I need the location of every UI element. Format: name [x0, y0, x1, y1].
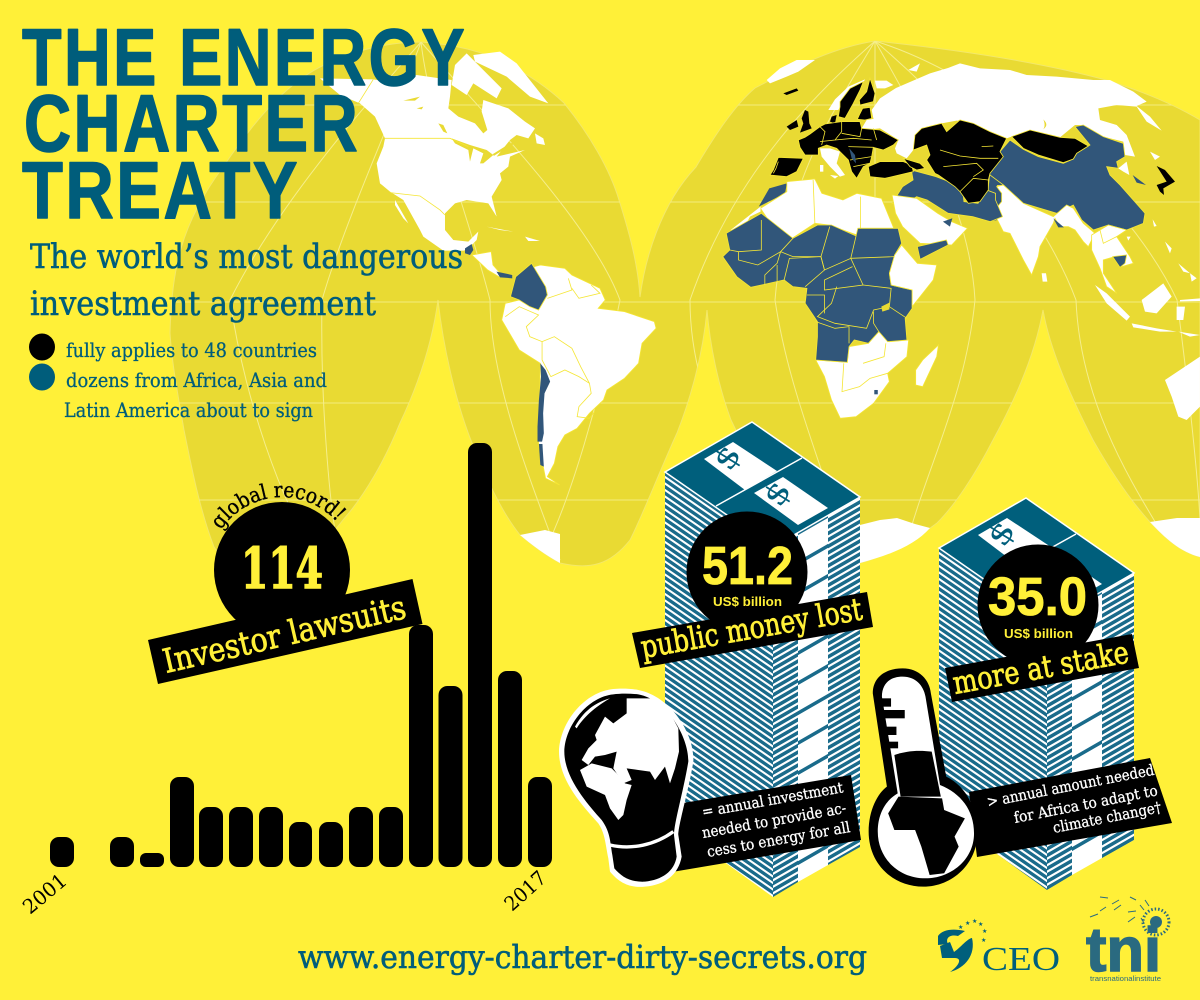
north america and greenland [320, 52, 548, 255]
icon: light bulb with globe [559, 689, 693, 887]
legend marker: black [29, 334, 55, 360]
europe and central asia [767, 60, 1007, 203]
legend: Latin America about to sign [64, 398, 313, 422]
legend [29, 334, 327, 422]
logo: CEO [938, 918, 1060, 978]
logo: CEO: ★ [965, 920, 970, 927]
money stack 1: $ [756, 474, 798, 513]
logo: tni: transnationalinstitute [1090, 974, 1161, 983]
callout: 35.0 more at stake: 35.0 [988, 567, 1087, 627]
subtitle: The world’s most dangerous [30, 237, 463, 277]
callout: 35.0 more at stake [945, 544, 1139, 702]
callout: 35.0 more at stake: more at stake [950, 635, 1132, 702]
logo: CEO: ★ [982, 928, 987, 935]
south east islands and australia [1095, 283, 1200, 420]
india [993, 185, 1095, 275]
callout: 51.2 public money lost: US$ billion [713, 594, 782, 609]
callout: 114 investor lawsuits [148, 483, 422, 684]
logo: CEO: ★ [981, 937, 986, 944]
title: CHARTER [24, 79, 360, 169]
icon: thermometer with africa [869, 668, 977, 887]
title: THE ENERGY [22, 13, 467, 103]
logo: CEO: CEO [982, 941, 1060, 978]
callout: 51.2 public money lost [632, 512, 873, 668]
callout: annual investment needed: needed to provide ac- [701, 799, 847, 842]
callout: 35.0 more at stake: US$ billion [1004, 626, 1073, 641]
callout: annual amount needed: for Africa to adapt to [1012, 781, 1159, 827]
money stack 2 [939, 498, 1134, 890]
callout: 114 investor lawsuits: Investor lawsuits [159, 587, 410, 681]
website url: www.energy-charter-dirty-secrets.org [298, 938, 867, 976]
south east asia [1092, 225, 1133, 293]
legend marker: blue [29, 364, 55, 390]
callout: 51.2 public money lost: public money lost [638, 591, 865, 666]
legend: dozens from Africa, Asia and [66, 368, 327, 392]
title [22, 13, 467, 236]
antarctica [520, 518, 1200, 563]
central and east africa in blue [723, 213, 937, 362]
money stack 1 [665, 422, 860, 897]
logo: CEO: ★ [978, 921, 983, 928]
money stack 2: $ [980, 514, 1022, 553]
logo: CEO: ★ [958, 924, 963, 931]
logo: CEO: ★ [972, 918, 977, 925]
iran, arabia, north africa [731, 170, 1003, 259]
subtitle: investment agreement [30, 284, 376, 324]
pakistan [972, 175, 1003, 222]
legend: fully applies to 48 countries [66, 338, 317, 362]
chart axis label 2001: 2001 [18, 868, 72, 919]
russia, china, south and east asia [872, 63, 1197, 293]
bar chart: investor lawsuits 2001-2017 [50, 443, 552, 867]
chart axis label 2017: 2017 [499, 866, 551, 916]
world map [170, 40, 1200, 566]
callout: 51.2 public money lost: 51.2 [702, 536, 793, 596]
callout: annual amount needed [969, 758, 1172, 857]
south america, central america, southern africa [472, 252, 938, 485]
subtitle [30, 237, 463, 324]
callout: annual investment needed: = annual investment [701, 778, 845, 821]
callout: annual amount needed: > annual amount needed [985, 761, 1156, 811]
logo: tni: tni [1086, 916, 1161, 985]
callout: annual investment needed: cess to energy for all [706, 818, 852, 861]
map lobes [170, 41, 1200, 575]
china [988, 125, 1145, 230]
callout: annual amount needed: climate change† [1051, 798, 1163, 837]
title: TREATY [22, 146, 300, 236]
callout: 114 investor lawsuits: 114 [241, 536, 323, 602]
money stack 1: $ [706, 438, 748, 477]
mongolia [1012, 130, 1088, 163]
callout: annual investment needed [660, 775, 861, 872]
callout: 114 investor lawsuits: global record! [214, 483, 346, 532]
